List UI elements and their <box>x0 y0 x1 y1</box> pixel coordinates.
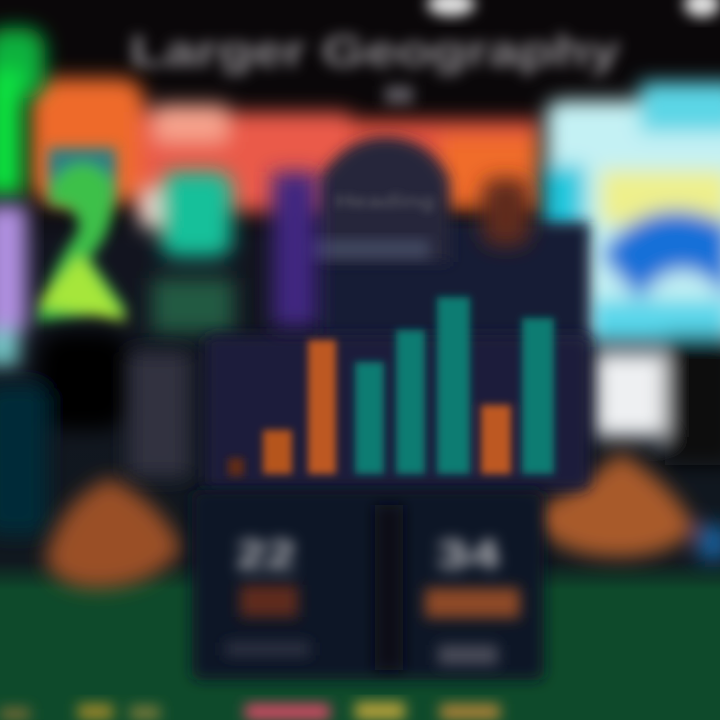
bottom colour strip <box>0 702 500 720</box>
stat block right <box>425 533 520 665</box>
top highlights <box>427 0 720 17</box>
dark figures at left <box>0 332 130 535</box>
central dark poster: Heading <box>335 191 435 213</box>
stat block left <box>225 533 310 656</box>
purple column <box>272 172 318 327</box>
stat block right: 34 <box>436 533 501 577</box>
teal figure <box>140 172 234 333</box>
right panel: sky and wave <box>543 82 720 465</box>
title <box>130 27 621 104</box>
gray panel <box>128 352 190 477</box>
central dark poster <box>192 137 590 680</box>
green bar at left <box>0 28 45 195</box>
brown mounds <box>45 452 720 588</box>
title: Larger Geography <box>130 27 621 76</box>
purple shape at left edge <box>0 205 27 366</box>
bar chart <box>228 297 554 476</box>
orange band <box>30 78 540 212</box>
stat block left: 22 <box>236 533 296 577</box>
left figure: green numeral <box>35 148 128 322</box>
